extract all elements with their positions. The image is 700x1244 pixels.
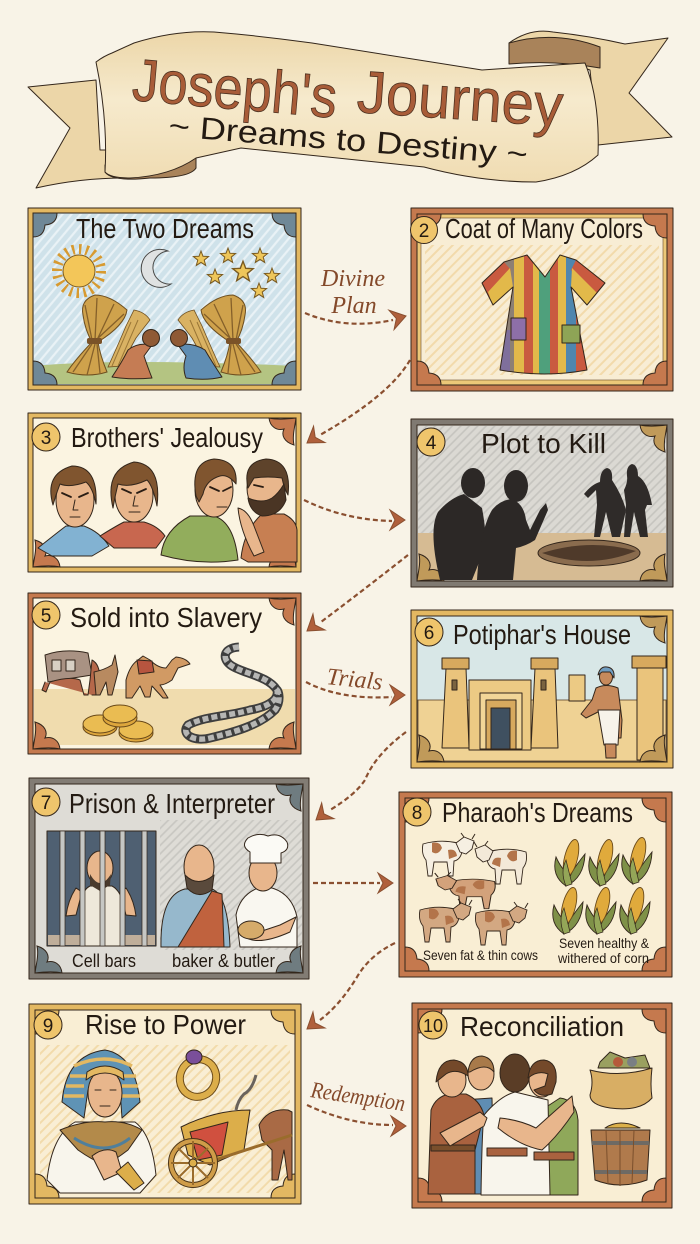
banner right roll bbox=[509, 37, 600, 68]
panel 1 frame bbox=[28, 208, 301, 390]
arrow 1 to 2 bbox=[305, 306, 409, 330]
butler chef figure bbox=[236, 834, 297, 947]
icon: stars bbox=[193, 248, 280, 297]
baker figure bbox=[161, 845, 230, 947]
panel 2 corners bbox=[417, 214, 667, 385]
panel 2 inner area bbox=[417, 214, 667, 385]
caravan wagon and animals bbox=[42, 651, 118, 695]
badge 5: 5 bbox=[41, 606, 51, 627]
arrow 7 to 8 bbox=[313, 873, 393, 893]
panel 2 frame bbox=[411, 208, 673, 391]
badge 6: 6 bbox=[424, 623, 434, 644]
arrow 5 to 6 bbox=[306, 682, 405, 705]
panel 10: Reconciliation bbox=[412, 1003, 672, 1208]
panel 9: Rise to Power bbox=[29, 1004, 301, 1204]
panel 5 title: Sold into Slavery bbox=[70, 602, 262, 633]
badge 10 bbox=[419, 1011, 447, 1039]
panel 1 grass bbox=[34, 362, 295, 384]
panel 8 corners bbox=[405, 798, 666, 971]
label: Divine Plan: Divine bbox=[320, 266, 385, 292]
caption: corn: withered of corn bbox=[557, 950, 649, 966]
label: Redemption: Redemption bbox=[308, 1077, 407, 1116]
pit bbox=[538, 540, 640, 566]
banner title text 2: Journey bbox=[355, 58, 565, 139]
panel 4 frame bbox=[411, 419, 673, 587]
icon: striped coat bbox=[482, 254, 606, 374]
label: Divine Plan bbox=[320, 266, 385, 319]
label: Divine Plan: Plan bbox=[330, 293, 377, 319]
panel 2 title: Coat of Many Colors bbox=[445, 213, 643, 244]
panel 9 frame bbox=[29, 1004, 301, 1204]
panel 2 inner paper bbox=[421, 218, 663, 380]
badge 2 bbox=[410, 216, 438, 244]
coins bbox=[83, 705, 153, 742]
panel 10 corners bbox=[418, 1009, 666, 1202]
arrow 8 to 9 bbox=[301, 943, 395, 1037]
figure: Potiphar bbox=[581, 667, 622, 758]
arrow 9 to 10 bbox=[307, 1105, 406, 1136]
panel 8: Pharaoh's Dreams bbox=[399, 792, 672, 977]
panel 1: The Two Dreams bbox=[28, 208, 301, 390]
badge 7: 7 bbox=[41, 793, 51, 814]
palace upper block bbox=[469, 680, 531, 750]
badge 6 bbox=[415, 618, 443, 646]
panel 9 inner area bbox=[35, 1010, 295, 1198]
panel 2 wash bbox=[425, 245, 659, 375]
panel 4 corners bbox=[417, 425, 667, 581]
panel 4 sky bbox=[417, 425, 667, 581]
banner main ribbon bbox=[96, 32, 598, 182]
label: Trials: Trials bbox=[325, 664, 384, 696]
badge 10: 10 bbox=[423, 1016, 443, 1036]
panel 3 corners bbox=[33, 418, 296, 567]
panel 5: Sold into Slavery bbox=[28, 593, 301, 754]
badge 2: 2 bbox=[419, 221, 429, 242]
title banner bbox=[28, 31, 672, 188]
panel 10 frame bbox=[412, 1003, 672, 1208]
kneeling figure right bbox=[170, 330, 222, 379]
pillar right bbox=[632, 656, 666, 760]
caption: cell bars: Cell bars bbox=[72, 951, 136, 971]
panel 1 title: The Two Dreams bbox=[76, 213, 254, 244]
kneeling figure left bbox=[112, 330, 160, 379]
prison cell bbox=[47, 831, 156, 946]
panel 5 corners bbox=[33, 598, 296, 749]
panel 10 inner area bbox=[418, 1009, 666, 1202]
panel 5 sand bbox=[34, 689, 295, 745]
badge 8 bbox=[403, 798, 431, 826]
panel 8 inner area bbox=[405, 798, 666, 971]
panel 3 frame bbox=[28, 413, 301, 572]
foreground silhouette plotters bbox=[433, 468, 548, 580]
banner left roll bbox=[105, 152, 196, 179]
caption: baker and butler: baker & butler bbox=[172, 951, 275, 971]
brother 2 bbox=[100, 462, 165, 548]
grain sack bbox=[590, 1052, 652, 1109]
arrow 2 to 3 bbox=[301, 360, 410, 451]
corn bbox=[553, 836, 652, 934]
banner title text: Joseph's bbox=[130, 46, 340, 131]
panel 3 inner area bbox=[33, 418, 296, 567]
pylon left bbox=[442, 658, 469, 748]
brother 3 bbox=[161, 459, 238, 562]
icon: signet ring bbox=[174, 1050, 222, 1103]
panel 1 sky hatching bbox=[34, 214, 295, 364]
camel saddle bbox=[137, 660, 154, 674]
panel 7: Prison & Interpreter bbox=[29, 778, 309, 979]
panel 9 wash bbox=[40, 1045, 290, 1193]
chain bbox=[186, 647, 279, 739]
panel 6 sky bbox=[417, 616, 667, 762]
banner left tail bbox=[28, 80, 196, 188]
panel 7 title: Prison & Interpreter bbox=[69, 788, 275, 819]
brother 4 whispering bbox=[238, 459, 297, 562]
panel 7 inner area bbox=[35, 784, 303, 973]
pharaoh figure bbox=[47, 1050, 156, 1193]
panel 5 inner area bbox=[33, 598, 296, 749]
badge 4: 4 bbox=[426, 433, 437, 454]
palace wall bbox=[418, 700, 666, 761]
embracing brothers bbox=[428, 1054, 578, 1195]
arrow 3 to 4 bbox=[304, 500, 405, 530]
camel bbox=[126, 656, 190, 698]
panel 6: Potiphar's House bbox=[411, 610, 673, 768]
panel 4 sky hatching bbox=[418, 426, 666, 533]
chariot and horse bbox=[171, 1075, 292, 1185]
wooden barrel bbox=[591, 1123, 650, 1186]
panel 2: Coat of Many Colors bbox=[410, 208, 673, 391]
panel 10 title: Reconciliation bbox=[460, 1011, 624, 1042]
small tower bbox=[569, 675, 585, 701]
panel 8 frame bbox=[399, 792, 672, 977]
panel 1 corners bbox=[33, 213, 296, 385]
badge 9 bbox=[34, 1011, 62, 1039]
arrow 4 to 5 bbox=[301, 555, 408, 639]
banner subtitle: ~ Dreams to Destiny ~ bbox=[167, 108, 529, 172]
icon: sun bbox=[57, 249, 101, 293]
distant silhouette figures bbox=[584, 464, 652, 537]
panel 6 corners bbox=[417, 616, 667, 762]
cell bars bbox=[60, 831, 147, 946]
panel 3 title: Brothers' Jealousy bbox=[71, 422, 263, 453]
caption: corn: Seven healthy & bbox=[559, 935, 650, 951]
badge 3 bbox=[32, 423, 60, 451]
cows bbox=[419, 833, 528, 945]
panel 7 frame bbox=[29, 778, 309, 979]
panel 6 title: Potiphar's House bbox=[453, 619, 631, 650]
wheat sheaves bbox=[67, 295, 261, 375]
badge 8: 8 bbox=[412, 803, 422, 824]
panel 3: Brothers' Jealousy bbox=[28, 413, 301, 572]
panel 4 title: Plot to Kill bbox=[481, 428, 606, 459]
banner right tail bbox=[509, 31, 672, 145]
panel 6 frame bbox=[411, 610, 673, 768]
prisoner bbox=[66, 851, 136, 946]
arrow 6 to 7 bbox=[310, 732, 406, 828]
panel 5 frame bbox=[28, 593, 301, 754]
pylon centre bbox=[531, 658, 558, 748]
panel 7 corners bbox=[35, 784, 303, 973]
badge 4 bbox=[417, 428, 445, 456]
brother 1 bbox=[38, 466, 109, 556]
badge 7 bbox=[32, 788, 60, 816]
panel 9 corners bbox=[35, 1010, 295, 1198]
panel 4: Plot to Kill bbox=[411, 419, 673, 587]
panel 4 ground bbox=[418, 533, 666, 580]
panel 8 title: Pharaoh's Dreams bbox=[442, 797, 633, 828]
badge 3: 3 bbox=[41, 428, 51, 449]
icon: moon bbox=[141, 249, 171, 287]
panel 9 title: Rise to Power bbox=[85, 1009, 246, 1040]
panel 1 sky bbox=[33, 213, 296, 385]
caption: corn bbox=[557, 935, 650, 966]
badge 5 bbox=[32, 601, 60, 629]
panel 7 hatching bbox=[160, 820, 302, 950]
caption: cows: Seven fat & thin cows bbox=[423, 947, 538, 963]
badge 9: 9 bbox=[43, 1016, 53, 1037]
palace gate bbox=[480, 693, 522, 749]
